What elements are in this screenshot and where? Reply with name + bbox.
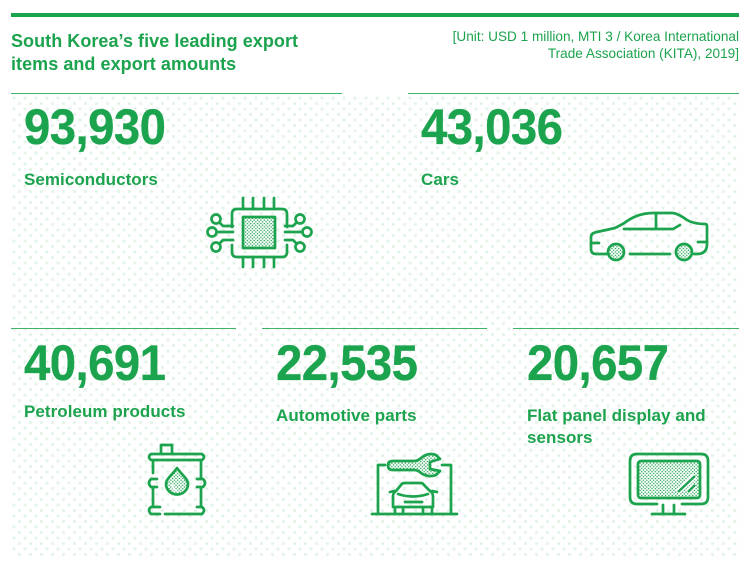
label: Flat panel display and — [527, 406, 706, 425]
icon: car — [590, 212, 708, 262]
panel: flat panel display and sensors — [513, 328, 739, 516]
value: 43,036 — [421, 99, 562, 155]
icon: oil barrel — [148, 444, 206, 516]
value: 20,657 — [527, 335, 668, 391]
label: Semiconductors — [24, 170, 158, 189]
source note — [453, 29, 739, 61]
value: 40,691 — [24, 335, 165, 391]
source note: [Unit: USD 1 million, MTI 3 / Korea International — [453, 29, 739, 44]
label: sensors — [527, 428, 593, 447]
panel: petroleum products — [11, 328, 236, 516]
value: 22,535 — [276, 335, 417, 391]
icon: car repair — [370, 452, 458, 516]
label: Petroleum products — [24, 402, 185, 421]
title: South Korea’s five leading export — [11, 31, 298, 51]
dotted background — [12, 96, 739, 556]
icon: microchip — [206, 196, 313, 268]
label — [527, 406, 706, 447]
panel: cars — [408, 93, 739, 262]
icon: monitor — [628, 452, 710, 516]
label: Automotive parts — [276, 406, 417, 425]
title — [11, 31, 298, 74]
panel: automotive parts — [262, 328, 487, 516]
label: Cars — [421, 170, 459, 189]
top bar — [11, 13, 739, 17]
value: 93,930 — [24, 99, 165, 155]
source note: Trade Association (KITA), 2019] — [548, 46, 739, 61]
panel: semiconductors — [11, 93, 342, 268]
title: items and export amounts — [11, 54, 236, 74]
